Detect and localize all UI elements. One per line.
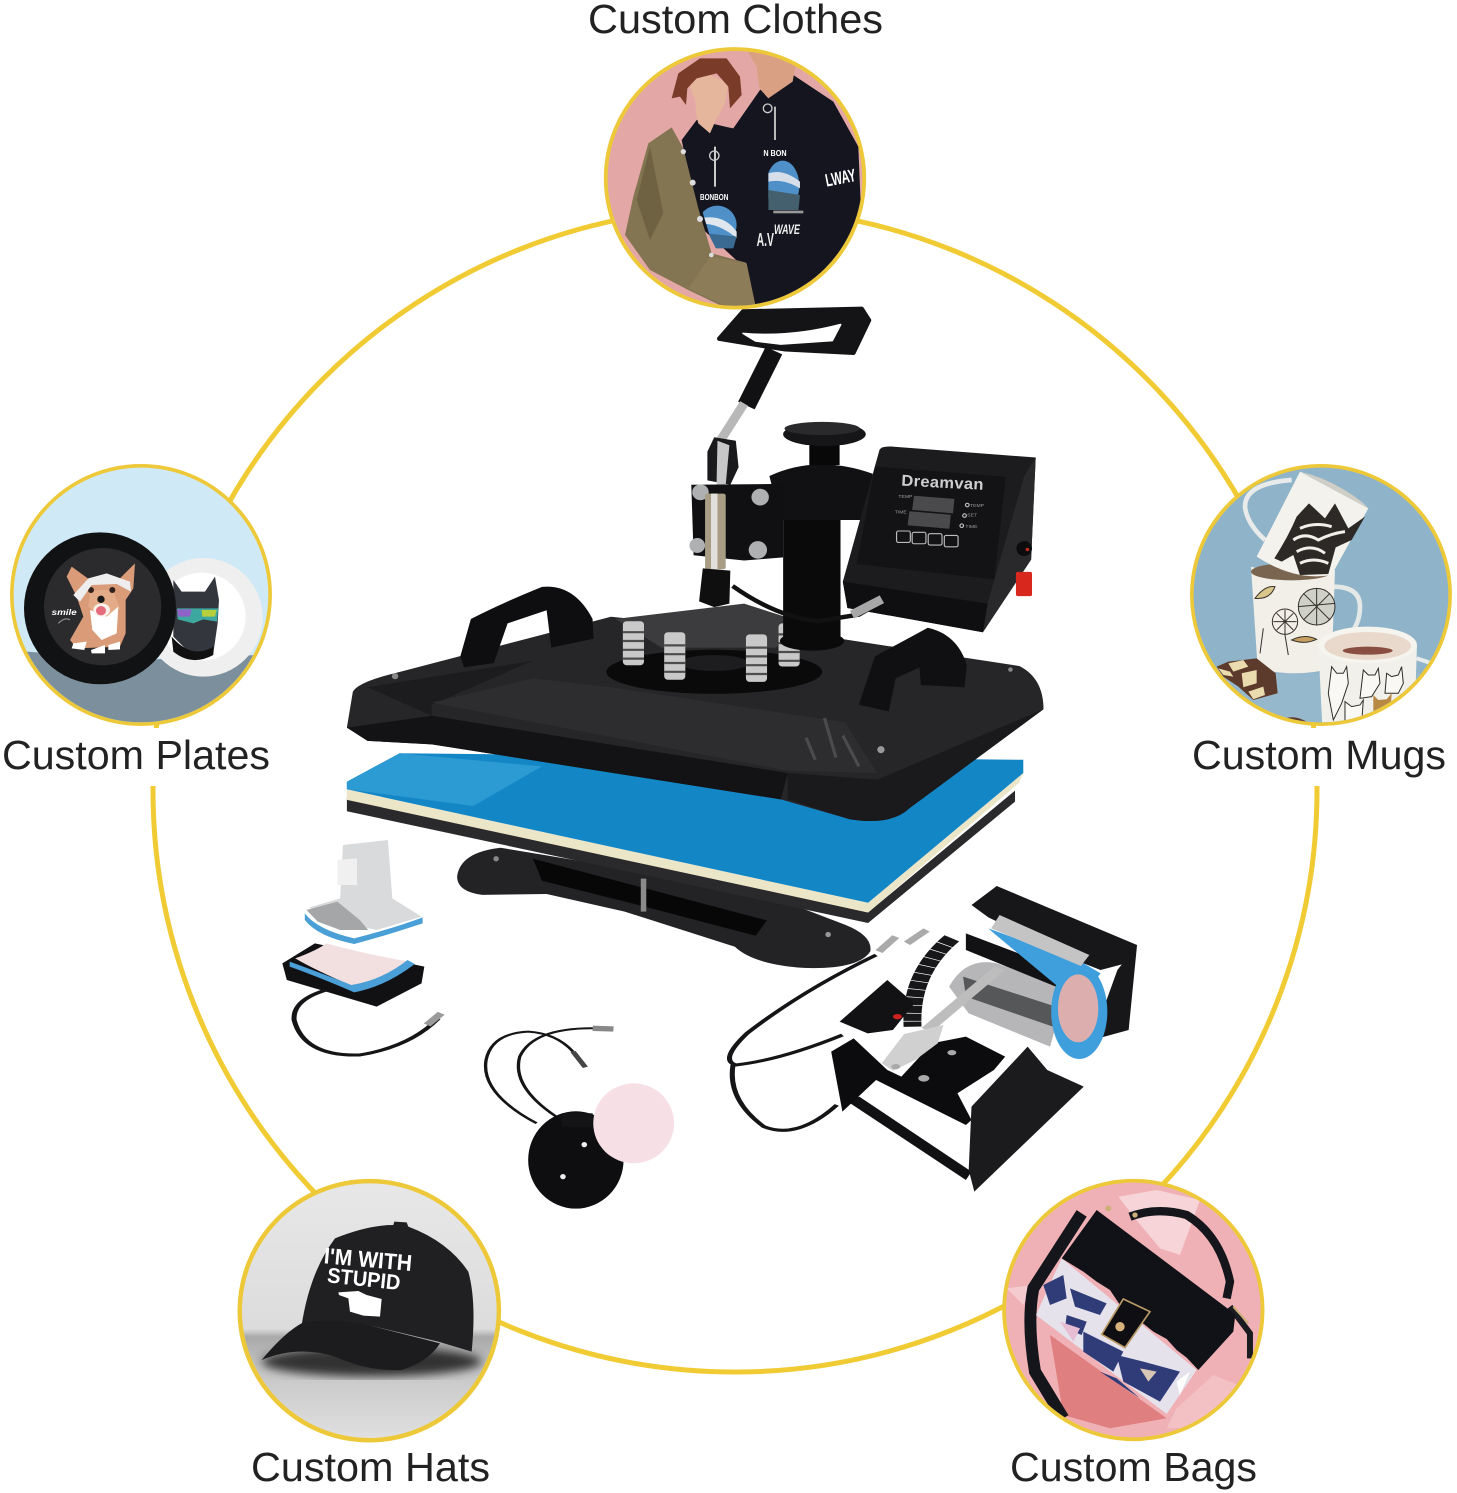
accessories [282, 840, 1137, 1209]
lower platen with blue pad [347, 753, 1023, 923]
heading: custom hats: Custom Hats [251, 1444, 490, 1490]
spring mount [606, 604, 822, 694]
photo: couple in printed sweatshirts [604, 47, 866, 310]
power switch [1016, 572, 1032, 596]
centre column and knob [769, 422, 873, 651]
left carrying handle [460, 587, 593, 667]
panel labels: TEMP [898, 494, 913, 500]
press handle and lever [689, 309, 869, 607]
display readouts [908, 496, 954, 529]
heading: custom plates: Custom Plates [2, 732, 270, 778]
panel labels [895, 494, 985, 530]
mug press attachment [729, 886, 1137, 1192]
heading: custom bags: Custom Bags [1010, 1444, 1257, 1490]
panel labels: TIME [895, 509, 907, 515]
panel: custom clothes [588, 0, 883, 320]
photo: couple in printed sweatshirts: LWAY [824, 165, 858, 191]
round cap plate attachment [486, 1028, 674, 1209]
photo: couple in printed sweatshirts: A.V [757, 229, 774, 250]
upper platen housing [347, 617, 1043, 821]
curved plate attachment, upper [305, 840, 423, 944]
photo: black handbag with printed panel [1000, 1175, 1270, 1445]
photo: couple in printed sweatshirts: WAVE [774, 221, 800, 237]
base foot [457, 848, 871, 968]
photo: corgi and cat plates: smile [52, 607, 77, 617]
yellow connecting ring [153, 208, 1317, 1372]
panel buttons [897, 503, 969, 547]
panel labels: TEMP [970, 503, 985, 509]
photo: corgi and cat plates [5, 460, 277, 732]
panel labels: TIME [965, 524, 978, 530]
heat press machine [347, 309, 1043, 968]
photo: black printed baseball cap [235, 1175, 505, 1445]
photo: couple in printed sweatshirts: BONBON [700, 193, 728, 202]
panel: custom mugs [1185, 460, 1457, 778]
panel: custom bags [1000, 1175, 1270, 1490]
panel: custom hats [235, 1175, 505, 1490]
right carrying handle [859, 628, 967, 711]
hose from controller [733, 586, 882, 621]
photo: stacked decorated mugs [1185, 460, 1457, 732]
panel: custom plates [2, 460, 277, 778]
panel labels: SET [967, 513, 977, 518]
photo: black printed baseball cap: STUPID [326, 1263, 402, 1295]
photo: black printed baseball cap: I'M WITH [323, 1242, 413, 1276]
curved plate attachment, lower [282, 943, 441, 1055]
heading: custom mugs: Custom Mugs [1192, 732, 1446, 778]
brand text: Dreamvan [901, 472, 985, 494]
control box [843, 446, 1036, 632]
photo: couple in printed sweatshirts: N BON [763, 149, 787, 158]
